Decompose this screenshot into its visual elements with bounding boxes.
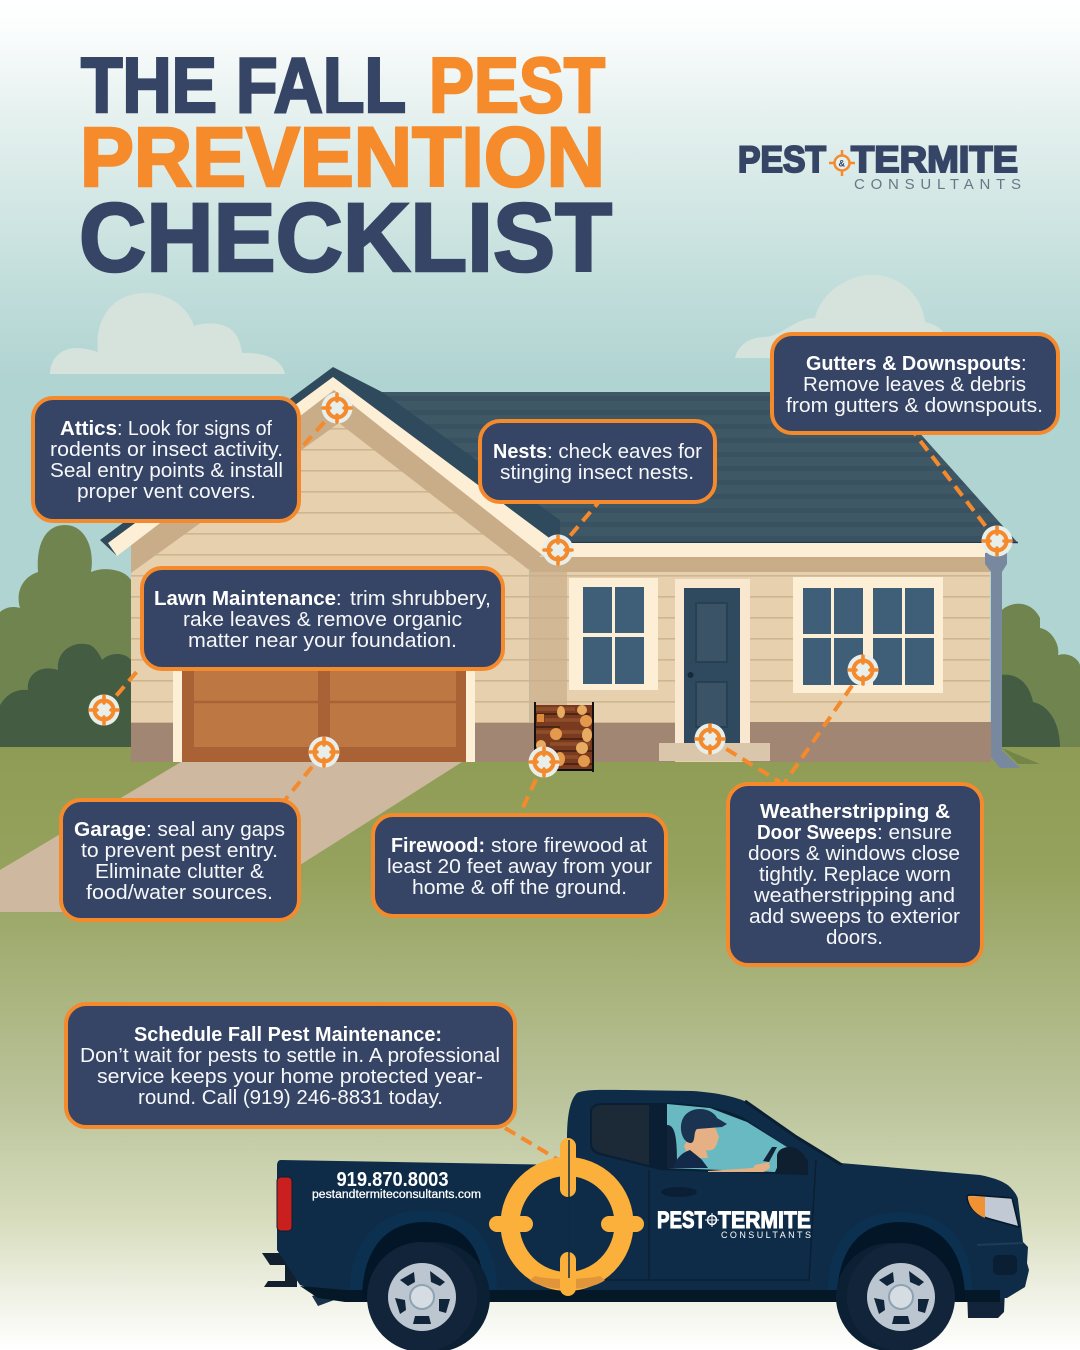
logo: TERMITE — [851, 139, 1018, 180]
downspout — [985, 553, 1020, 768]
callout: attics — [33, 398, 299, 521]
truck — [262, 1090, 1029, 1350]
callout: gutters: Remove leaves & debris — [803, 374, 1026, 396]
front wheel — [836, 1243, 955, 1350]
rear wheel — [367, 1242, 490, 1350]
title: PREVENTION — [80, 110, 605, 204]
callout: gutters: from gutters & downspouts. — [786, 395, 1043, 417]
door handle — [661, 1187, 697, 1197]
logo: CONSULTANTS — [854, 176, 1021, 193]
rear wheel flare — [350, 1210, 497, 1290]
callout: lawn maintenance: trim shrubbery, — [350, 588, 491, 610]
truck logo: TERMITE — [718, 1207, 811, 1234]
truck website text: pestandtermiteconsultants.com — [312, 1189, 481, 1201]
rear window — [592, 1105, 649, 1165]
cloud: left — [50, 293, 285, 374]
firewood rack — [534, 702, 594, 772]
logo — [738, 139, 1021, 193]
callout: weatherstripping — [728, 784, 982, 965]
marker: firewood — [528, 746, 560, 778]
front step — [659, 743, 770, 761]
callout: weatherstripping: weatherstripping and — [753, 885, 955, 907]
callout: lawn maintenance: matter near your foundation. — [188, 630, 457, 652]
side mirror — [777, 1147, 808, 1174]
lower front bumper — [967, 1290, 1005, 1318]
foundation — [131, 722, 991, 762]
connector lines — [104, 408, 997, 1162]
marker: attics — [322, 392, 352, 424]
callout: attics: rodents or insect activity. — [50, 439, 283, 461]
callout: weatherstripping: tightly. Replace worn — [759, 864, 951, 886]
window left — [569, 578, 658, 690]
callout: firewood: Firewood: — [391, 835, 485, 857]
callout: garage: to prevent pest entry. — [81, 840, 278, 862]
house — [100, 367, 1020, 772]
front wheel flare — [828, 1212, 972, 1290]
callout: attics: proper vent covers. — [77, 481, 256, 503]
callout: lawn maintenance — [142, 568, 503, 669]
marker: nests — [542, 534, 574, 566]
bushes: right — [1000, 604, 1080, 747]
marker: door — [694, 724, 726, 754]
callout: schedule maintenance: Schedule Fall Pest Maintenance: — [134, 1024, 442, 1046]
roof trim — [108, 377, 986, 557]
tail light — [277, 1177, 292, 1231]
callout: nests: Nests — [493, 441, 547, 463]
side glass — [667, 1104, 787, 1172]
callout: firewood: home & off the ground. — [412, 877, 627, 899]
title — [79, 41, 612, 292]
cloud: right — [735, 275, 955, 358]
callout: attics: Seal entry points & install — [50, 460, 283, 482]
logo: & — [838, 158, 846, 168]
driveway — [0, 762, 462, 912]
callout: lawn maintenance: : — [336, 588, 342, 610]
truck phone text: 919.870.8003 — [336, 1169, 448, 1191]
title: CHECKLIST — [79, 183, 612, 292]
bushes: left — [0, 525, 131, 747]
logo: PEST — [738, 139, 826, 180]
callout: garage: : seal any gaps — [146, 819, 285, 841]
callout: gutters: : — [1021, 353, 1027, 375]
title: PEST — [429, 41, 605, 129]
marker: gutters — [982, 526, 1012, 556]
door lines — [569, 1160, 816, 1280]
truck logo — [657, 1207, 811, 1240]
callout: weatherstripping: Door Sweeps — [757, 822, 877, 844]
gable shadow band — [131, 390, 545, 573]
rear bumper — [262, 1253, 297, 1287]
callout: nests — [480, 421, 715, 502]
callout: gutters: Gutters & Downspouts — [806, 353, 1021, 375]
callout: weatherstripping: doors & windows close — [748, 843, 960, 865]
driver — [667, 1109, 777, 1172]
background: lawn — [0, 747, 1080, 1350]
callout: weatherstripping: : ensure — [877, 822, 952, 844]
callout: lawn maintenance: rake leaves & remove organic — [183, 609, 462, 631]
callout: weatherstripping: doors. — [826, 927, 883, 949]
door — [675, 579, 750, 744]
front wheel arch — [837, 1222, 965, 1300]
callout: garage: Eliminate clutter & — [95, 861, 265, 883]
truck logo: PEST — [657, 1207, 706, 1234]
callout: lawn maintenance: Lawn Maintenance — [154, 588, 336, 610]
truck underside — [300, 1286, 1000, 1302]
callout: garage: Garage — [74, 819, 146, 841]
background: sky — [0, 0, 1080, 760]
callout: schedule maintenance — [66, 1004, 515, 1127]
callout: garage: food/water sources. — [86, 882, 273, 904]
truck logo: CONSULTANTS — [721, 1230, 811, 1240]
callout: weatherstripping: add sweeps to exterior — [749, 906, 960, 928]
windshield edge — [745, 1101, 842, 1165]
callout: gutters — [772, 334, 1058, 433]
truck body — [277, 1090, 1029, 1298]
callout: schedule maintenance: service keeps your home protected year- — [97, 1066, 483, 1088]
headlight — [967, 1195, 1019, 1227]
marker: lawn — [88, 694, 120, 726]
gable wall — [131, 395, 529, 762]
callout: attics: : Look for signs of — [117, 418, 272, 440]
marker: garage — [308, 736, 340, 768]
main wall — [530, 556, 990, 762]
cab window frame — [590, 1103, 808, 1175]
title: THE FALL — [81, 41, 406, 129]
marker: window — [848, 654, 878, 686]
grille vent — [993, 1255, 1017, 1275]
rear wheel arch — [362, 1222, 485, 1300]
lawn shadow at downspout — [1002, 748, 1040, 764]
window right — [793, 577, 943, 693]
callout: attics: Attics — [60, 418, 117, 440]
callout: firewood: least 20 feet away from your — [387, 856, 652, 878]
garage door — [173, 670, 475, 762]
target emblem — [489, 1138, 644, 1296]
callout: nests: stinging insect nests. — [500, 462, 694, 484]
exhaust — [312, 1289, 345, 1306]
gable roof edge — [100, 367, 560, 555]
callout: schedule maintenance: round. Call (919) 246-8831 today. — [138, 1087, 443, 1109]
callout: nests: : check eaves for — [547, 441, 702, 463]
callout: weatherstripping: Weatherstripping & — [760, 801, 950, 823]
callout: garage — [61, 800, 299, 920]
bumper line — [977, 1243, 1023, 1245]
callout: schedule maintenance: Don’t wait for pests to settle in. A professional — [80, 1045, 500, 1067]
callout: firewood — [373, 815, 666, 916]
callout: firewood: store firewood at — [491, 835, 647, 857]
main roof — [380, 392, 1018, 543]
